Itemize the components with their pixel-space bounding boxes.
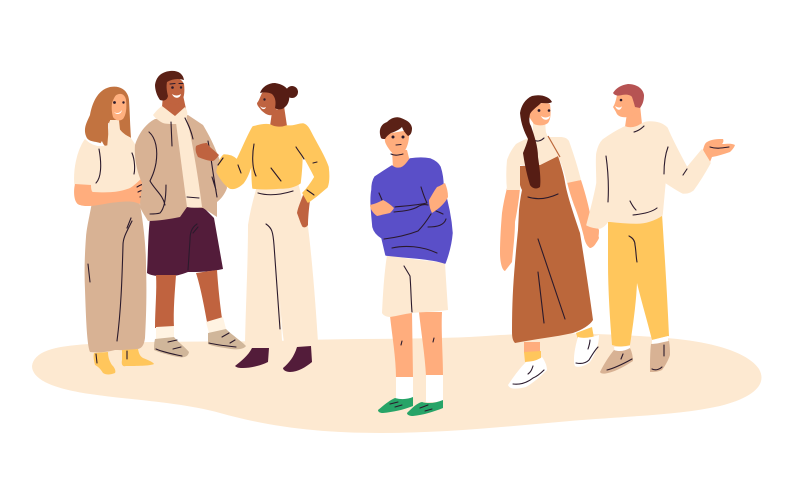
shoes: [378, 397, 443, 416]
sweater: [371, 158, 452, 263]
palm line: [710, 147, 729, 148]
trouser lines: [88, 218, 132, 363]
hood collar: [153, 106, 187, 125]
knee marks: [401, 338, 434, 345]
shoe lines: [390, 402, 432, 411]
hair and bun: [260, 83, 289, 109]
socks: [396, 375, 443, 402]
sweater: [217, 124, 329, 202]
pointing hand: [196, 143, 219, 161]
socks: [156, 317, 226, 339]
boots: [235, 346, 312, 372]
neck: [392, 150, 410, 170]
hair: [155, 71, 184, 101]
socks: [614, 336, 668, 354]
head: [613, 88, 641, 117]
neck: [162, 95, 186, 117]
person: woman in yellow sweater: [196, 83, 329, 372]
collar line: [534, 138, 544, 141]
raised hand: [703, 139, 735, 162]
shoe lines: [156, 333, 236, 356]
jacket: [135, 115, 227, 221]
ground blob: [32, 334, 761, 433]
face features: [541, 116, 550, 120]
person: man in cream sweater: [584, 84, 735, 374]
boots: [94, 349, 154, 374]
person: boy in purple sweater: [370, 117, 452, 416]
head: [385, 130, 409, 155]
arm: [74, 175, 149, 206]
top: [75, 122, 146, 192]
person: woman with long hair: [74, 87, 154, 374]
person: man in jacket and shorts: [135, 71, 246, 357]
trouser lines: [258, 191, 293, 329]
legs: [390, 312, 443, 378]
neck: [110, 120, 120, 130]
head: [164, 77, 184, 104]
left arm: [500, 188, 520, 271]
face features: [615, 106, 622, 110]
arm lines: [379, 187, 446, 253]
trousers: [608, 214, 669, 346]
hair back: [85, 87, 131, 143]
person: woman in brown dress: [500, 95, 599, 389]
trousers: [245, 182, 318, 342]
holding hand: [584, 226, 599, 248]
dress: [512, 156, 593, 343]
jacket lines: [149, 118, 217, 214]
short lines: [188, 224, 198, 270]
neck: [625, 105, 642, 128]
sweater lines: [606, 126, 687, 215]
shoe lines: [513, 340, 598, 384]
hair: [613, 84, 644, 108]
face: [112, 94, 126, 120]
top: [506, 130, 581, 190]
braid and hair: [520, 95, 552, 188]
neck and collar: [533, 120, 546, 136]
sweater: [587, 122, 710, 228]
face: [528, 103, 551, 125]
dress lines: [528, 194, 565, 323]
short line: [404, 266, 412, 312]
face: [257, 92, 278, 115]
inner shirt: [175, 115, 202, 208]
right hand: [429, 183, 448, 213]
shoes: [600, 341, 670, 374]
legs: [155, 270, 222, 328]
right shoe: [574, 335, 599, 367]
shoes: [154, 329, 246, 357]
dress strap: [548, 136, 560, 157]
face features: [392, 136, 394, 138]
face features: [172, 94, 181, 98]
legs and socks: [524, 342, 540, 353]
neck: [270, 106, 287, 128]
shorts: [382, 255, 448, 317]
shorts: [147, 207, 223, 277]
hand on hip: [297, 195, 310, 227]
shoe lines: [607, 345, 664, 370]
trousers: [85, 192, 146, 352]
hair front: [101, 90, 120, 148]
sweater lines: [218, 144, 317, 195]
left hand: [370, 200, 394, 216]
eyes and smile: [114, 110, 122, 114]
sleeve lines and fingers: [96, 149, 149, 197]
trouser line: [629, 236, 637, 262]
right arm: [567, 180, 599, 248]
left shoe: [508, 357, 547, 389]
hair: [380, 117, 412, 139]
